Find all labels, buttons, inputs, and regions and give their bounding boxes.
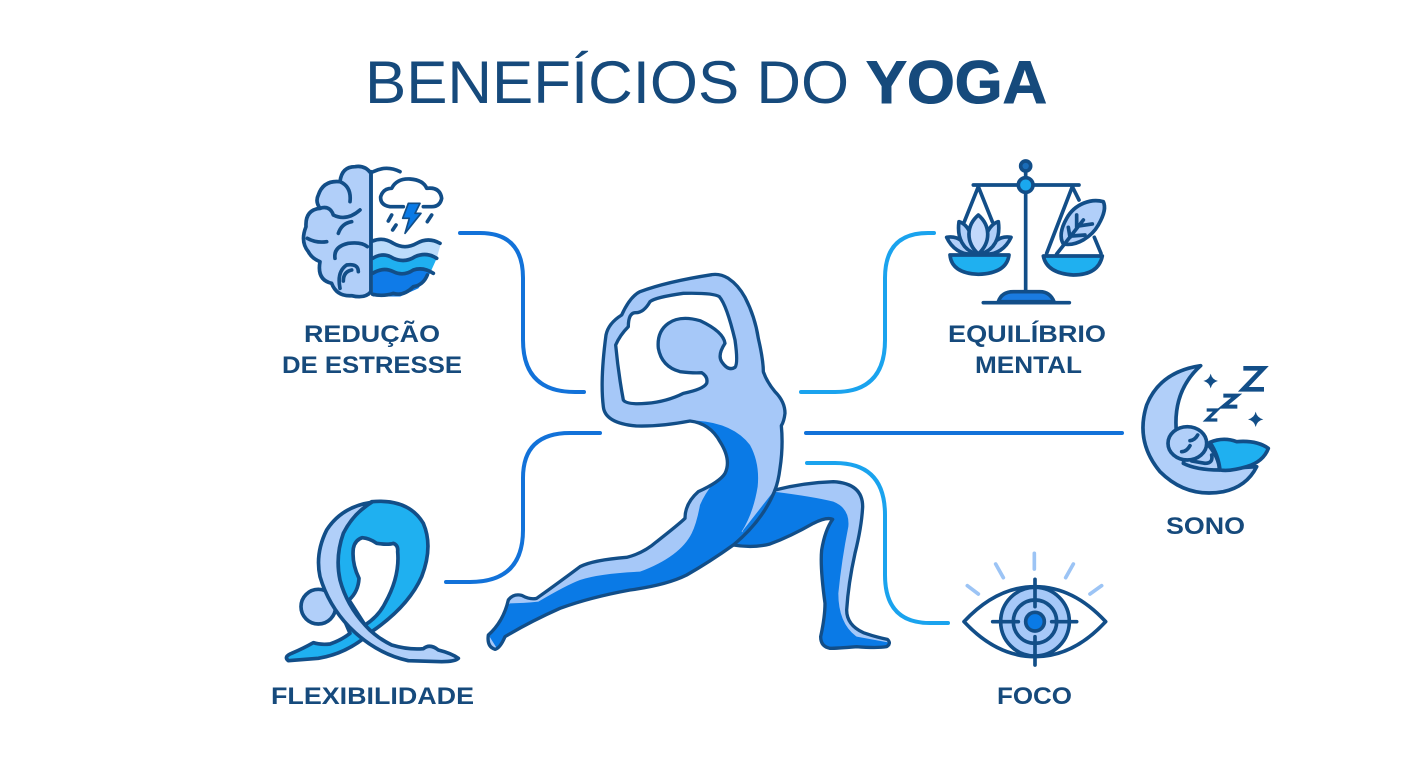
icon: sleeping figure on crescent moon bbox=[1143, 366, 1268, 493]
panel: flexibilidade bbox=[271, 501, 474, 710]
title bbox=[365, 49, 1047, 116]
panel: equilíbrio mental bbox=[947, 161, 1106, 379]
label: equilíbrio mental bbox=[948, 320, 1106, 379]
central yoga figure bbox=[483, 274, 893, 653]
connector: redução de estresse bbox=[460, 233, 584, 392]
label: flexibilidade: FLEXIBILIDADE bbox=[271, 683, 474, 710]
icon: eye with target bbox=[964, 553, 1106, 665]
label: redução de estresse bbox=[282, 320, 462, 379]
icon: brain and storm bbox=[303, 166, 442, 298]
connector: sono bbox=[806, 431, 1122, 435]
label: redução de estresse: REDUÇÃO bbox=[304, 320, 440, 348]
connector: foco bbox=[807, 463, 948, 623]
label: equilíbrio mental: EQUILÍBRIO bbox=[948, 320, 1106, 348]
title: YOGA bbox=[866, 49, 1047, 116]
connector: equilíbrio mental bbox=[801, 233, 934, 392]
label: foco: FOCO bbox=[997, 683, 1072, 710]
icon: flexible body loop bbox=[286, 501, 458, 662]
label: redução de estresse: DE ESTRESSE bbox=[282, 352, 462, 379]
icon: balance scale with lotus and feather bbox=[947, 161, 1105, 303]
label: sono: SONO bbox=[1166, 513, 1245, 540]
title: BENEFÍCIOS DO bbox=[365, 49, 849, 116]
panel: sono bbox=[1143, 366, 1268, 540]
label: equilíbrio mental: MENTAL bbox=[975, 352, 1082, 379]
connector: flexibilidade bbox=[446, 433, 600, 582]
panel: foco bbox=[964, 553, 1106, 710]
panel: redução de estresse bbox=[282, 166, 462, 379]
